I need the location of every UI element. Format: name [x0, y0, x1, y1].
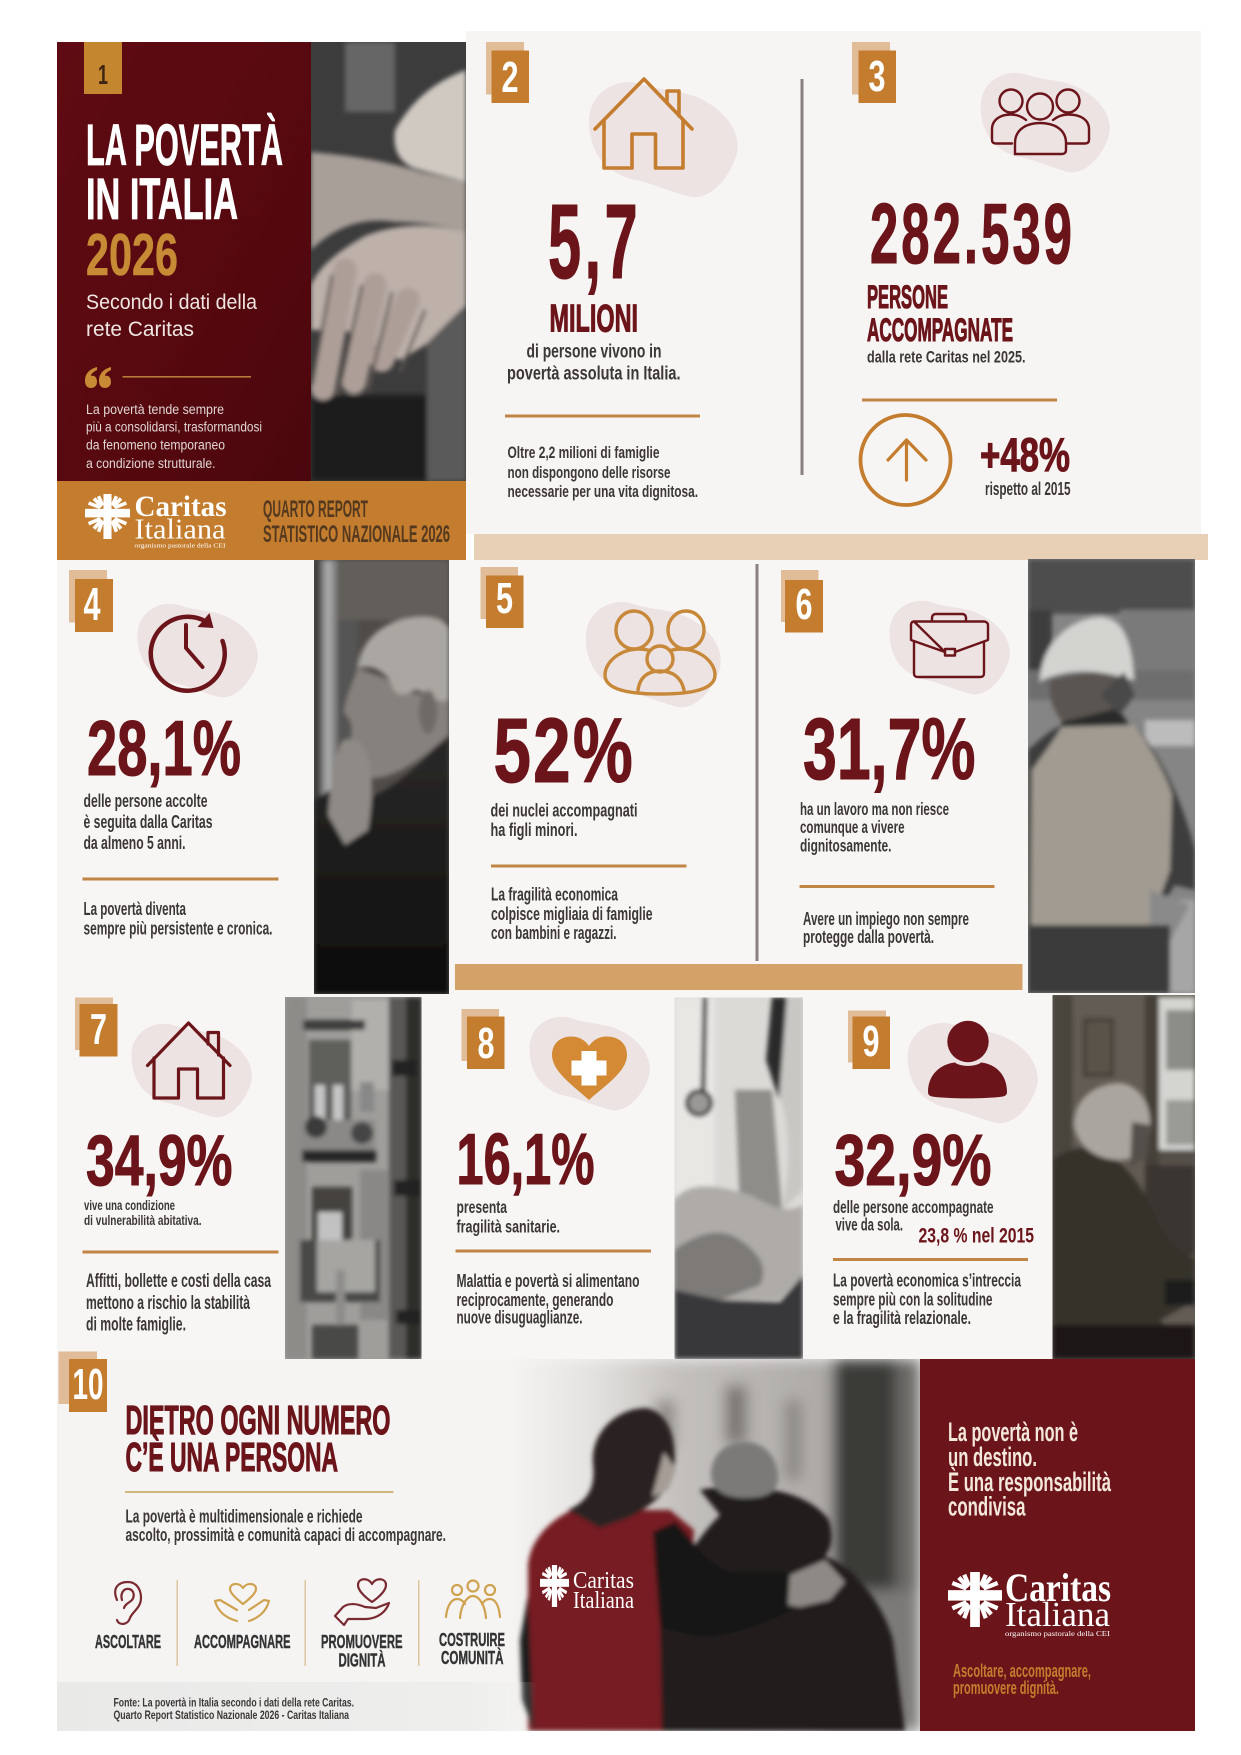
closing statement: condivisa [948, 1492, 1026, 1522]
description: povertà assoluta in Italia. [507, 364, 680, 384]
panel 6: 31,7% [781, 559, 1195, 993]
figure 28,1%: 28,1% [87, 704, 241, 792]
photo: volunteer and man from behind [57, 1359, 920, 1731]
source band [57, 1682, 537, 1731]
note [86, 1271, 271, 1336]
description: è seguita dalla Caritas [84, 812, 212, 832]
icon: up arrow circle [860, 415, 950, 505]
title [86, 113, 283, 288]
photo: old building [285, 997, 422, 1359]
report label [263, 496, 450, 548]
note: Oltre 2,2 milioni di famiglie [508, 443, 660, 462]
description: comunque a vivere [800, 817, 905, 837]
closing motto: promuovere dignità. [953, 1678, 1059, 1698]
closing statement: È una responsabilità [948, 1466, 1112, 1497]
description [490, 800, 638, 840]
note: Affitti, bollette e costi della casa [86, 1271, 271, 1292]
icon: house on blob [131, 1023, 252, 1117]
label persone accompagnate [867, 279, 1013, 348]
note: Avere un impiego non sempre [803, 909, 969, 929]
note: Malattia e povertà si alimentano [456, 1271, 640, 1291]
description [507, 342, 680, 384]
description: dignitosamente. [800, 836, 892, 856]
logo: Caritas Italiana: Caritas [1005, 1565, 1111, 1610]
description: dei nuclei accompagnati [490, 800, 638, 820]
logo: Caritas Italiana: Caritas [134, 490, 226, 523]
vest logo [540, 1565, 634, 1614]
description: ha figli minori. [490, 820, 578, 840]
note: protegge dalla povertà. [803, 927, 934, 947]
number tab 4: 4 [84, 578, 101, 630]
note: non dispongono delle risorse [508, 463, 670, 482]
closing motto: Ascoltare, accompagnare, [953, 1661, 1091, 1681]
closing statement: un destino. [948, 1442, 1037, 1472]
note: reciprocamente, generando [456, 1290, 614, 1310]
heading [126, 1397, 390, 1480]
subtitle [86, 291, 257, 341]
subtitle: Secondo i dati della [86, 291, 257, 314]
vest logo: Italiana [573, 1588, 634, 1614]
number tab 9 [848, 1010, 890, 1069]
note: sempre più persistente e cronica. [84, 918, 272, 938]
note [803, 909, 969, 947]
note: e la fragilità relazionale. [833, 1308, 971, 1328]
action: accompagnare: ACCOMPAGNARE [194, 1632, 290, 1652]
heading: DIETRO OGNI NUMERO [126, 1397, 390, 1443]
note: La povertà diventa [84, 899, 187, 919]
description [84, 1197, 202, 1228]
note: La povertà economica s’intreccia [833, 1270, 1022, 1290]
note [456, 1271, 640, 1328]
figure 32,9%: 32,9% [834, 1121, 992, 1201]
number tab 6: 6 [796, 580, 812, 629]
photo: construction worker [1028, 559, 1195, 993]
intro text [126, 1506, 446, 1545]
photo: doctor holding hands [674, 998, 803, 1359]
note [491, 884, 652, 943]
note: nuove disuguaglianze. [456, 1308, 582, 1328]
title: 2026 [86, 222, 178, 288]
panel 2: 5,7 milioni [486, 42, 738, 501]
title: IN ITALIA [86, 167, 238, 232]
logo: Caritas Italiana: organismo pastorale della CEI [1005, 1629, 1111, 1638]
icon: house on blob [589, 79, 738, 197]
description [456, 1197, 560, 1236]
intro text: ascolto, prossimità e comunità capaci di accompagnare. [126, 1525, 446, 1545]
number tab 6 [781, 570, 823, 632]
panel 8: 16,1% [456, 997, 803, 1359]
panel 9: 32,9% [833, 995, 1195, 1359]
subtitle: rete Caritas [86, 318, 194, 341]
footer band [57, 481, 466, 560]
title: LA POVERTÀ [86, 113, 283, 178]
description: presenta [456, 1197, 507, 1217]
number tab 1 [84, 42, 122, 94]
logo: Caritas Italiana [948, 1565, 1111, 1638]
note: con bambini e ragazzi. [491, 923, 616, 943]
photo: elderly man at window [314, 560, 449, 994]
number tab 3: 3 [868, 52, 886, 101]
icon: group on blob [981, 73, 1110, 172]
description [833, 1197, 994, 1234]
panel 3: persone accompagnate [852, 42, 1110, 505]
vest logo: Caritas [573, 1568, 634, 1594]
photo: elderly person at window [1052, 995, 1195, 1359]
closing motto [953, 1661, 1091, 1698]
number tab 7: 7 [90, 1005, 107, 1054]
closing statement [948, 1417, 1112, 1522]
report label: QUARTO REPORT [263, 496, 368, 523]
action: costruire comunita [439, 1580, 505, 1668]
quote text: a condizione strutturale. [86, 456, 216, 471]
logo: Caritas Italiana: Italiana [134, 514, 226, 546]
panel 7: 34,9% [75, 997, 422, 1359]
label persone accompagnate: PERSONE [867, 279, 948, 315]
note [833, 1270, 1022, 1328]
description: da almeno 5 anni. [84, 833, 186, 853]
figure 282.539: 282.539 [870, 187, 1075, 282]
figure 5,7: 5,7 [548, 183, 641, 301]
figure 52%: 52% [494, 700, 635, 802]
number tab 1: 1 [98, 59, 108, 90]
source: Quarto Report Statistico Nazionale 2026 - Caritas Italiana [114, 1710, 349, 1722]
description: di persone vivono in [526, 342, 662, 362]
action: costruire comunita: COSTRUIRE [439, 1630, 505, 1650]
label persone accompagnate: ACCOMPAGNATE [867, 312, 1013, 348]
note: di molte famiglie. [86, 1314, 186, 1336]
number tab 8: 8 [478, 1019, 494, 1068]
note [84, 899, 272, 938]
number tab 5 [480, 567, 524, 628]
stat +48% [980, 428, 1070, 499]
action: costruire comunita: COMUNITÀ [441, 1647, 504, 1668]
quote text: da fenomeno temporaneo [86, 438, 225, 452]
closing statement: La povertà non è [948, 1417, 1078, 1447]
description: di vulnerabilità abitativa. [84, 1212, 202, 1228]
panel 4: 28,1% [69, 560, 449, 994]
quote text: La povertà tende sempre [86, 402, 224, 417]
action: accompagnare [194, 1584, 290, 1652]
quote text [86, 402, 262, 471]
description: delle persone accolte [84, 791, 208, 811]
source [114, 1698, 354, 1722]
icon: quotation mark [85, 367, 251, 388]
heading: C’È UNA PERSONA [126, 1434, 338, 1480]
note [508, 443, 698, 501]
figure 34,9%: 34,9% [86, 1122, 232, 1201]
description: fragilità sanitarie. [456, 1216, 560, 1236]
description [84, 791, 212, 853]
logo: Caritas Italiana: Italiana [1005, 1595, 1110, 1634]
number tab 10 [58, 1352, 107, 1412]
action: ascoltare: ASCOLTARE [95, 1632, 161, 1652]
description: dalla rete Caritas nel 2025. [867, 348, 1026, 366]
note: sempre più con la solitudine [833, 1290, 992, 1310]
comparison 2015: 23,8 % nel 2015 [918, 1224, 1034, 1248]
description: vive da sola. [836, 1214, 903, 1234]
number tab 5: 5 [496, 574, 513, 623]
number tab 7 [75, 998, 118, 1056]
photo: clasped hands [311, 42, 466, 481]
action: promuovere dignita: PROMUOVERE [321, 1632, 402, 1652]
source: Fonte: La povertà in Italia secondo i dati della rete Caritas. [114, 1698, 354, 1710]
icon: person on blob [908, 1021, 1038, 1123]
panel background: sections 2 and 3 [466, 31, 1201, 534]
tan band [455, 964, 1022, 990]
number tab 3 [852, 42, 896, 103]
number tab 2: 2 [502, 53, 518, 102]
stat +48%: rispetto al 2015 [985, 479, 1070, 499]
panel 10: dietro ogni numero [57, 1352, 1195, 1731]
panel 5: 52% [480, 567, 721, 943]
action: ascoltare [95, 1582, 161, 1652]
number tab 2 [486, 42, 529, 103]
closing panel [920, 1359, 1195, 1731]
quote text: più a consolidarsi, trasformandosi [86, 420, 262, 434]
note: necessarie per una vita dignitosa. [508, 482, 698, 501]
note: mettono a rischio la stabilità [86, 1293, 250, 1314]
beige band [474, 534, 1208, 560]
number tab 9: 9 [862, 1017, 880, 1066]
description: delle persone accompagnate [833, 1197, 994, 1217]
icon: family on blob [586, 602, 721, 707]
icon: heart with cross on blob [529, 1017, 650, 1110]
panel 1: cover [57, 42, 466, 560]
logo: Caritas Italiana: organismo pastorale della CEI [134, 542, 226, 550]
stat +48%: +48% [980, 428, 1070, 481]
number tab 10: 10 [72, 1360, 104, 1409]
label milioni: MILIONI [550, 298, 638, 340]
report label: STATISTICO NAZIONALE 2026 [263, 521, 450, 548]
icon: briefcase on blob [889, 601, 1010, 694]
figure 16,1%: 16,1% [456, 1120, 594, 1200]
action: promuovere dignita: DIGNITÀ [338, 1650, 386, 1670]
description [800, 799, 949, 856]
logo: Caritas Italiana [85, 490, 226, 550]
note: colpisce migliaia di famiglie [491, 904, 652, 924]
number tab 4 [69, 570, 113, 632]
intro text: La povertà è multidimensionale e richiede [126, 1506, 362, 1526]
action: promuovere dignita [321, 1579, 402, 1670]
figure 31,7%: 31,7% [803, 701, 976, 798]
number tab 8 [462, 1009, 504, 1069]
description: ha un lavoro ma non riesce [800, 799, 949, 819]
note: La fragilità economica [491, 884, 619, 904]
description: vive una condizione [84, 1197, 175, 1213]
icon: clock on blob [137, 604, 258, 697]
panel background: rows 2 and 3 [57, 560, 1195, 1360]
